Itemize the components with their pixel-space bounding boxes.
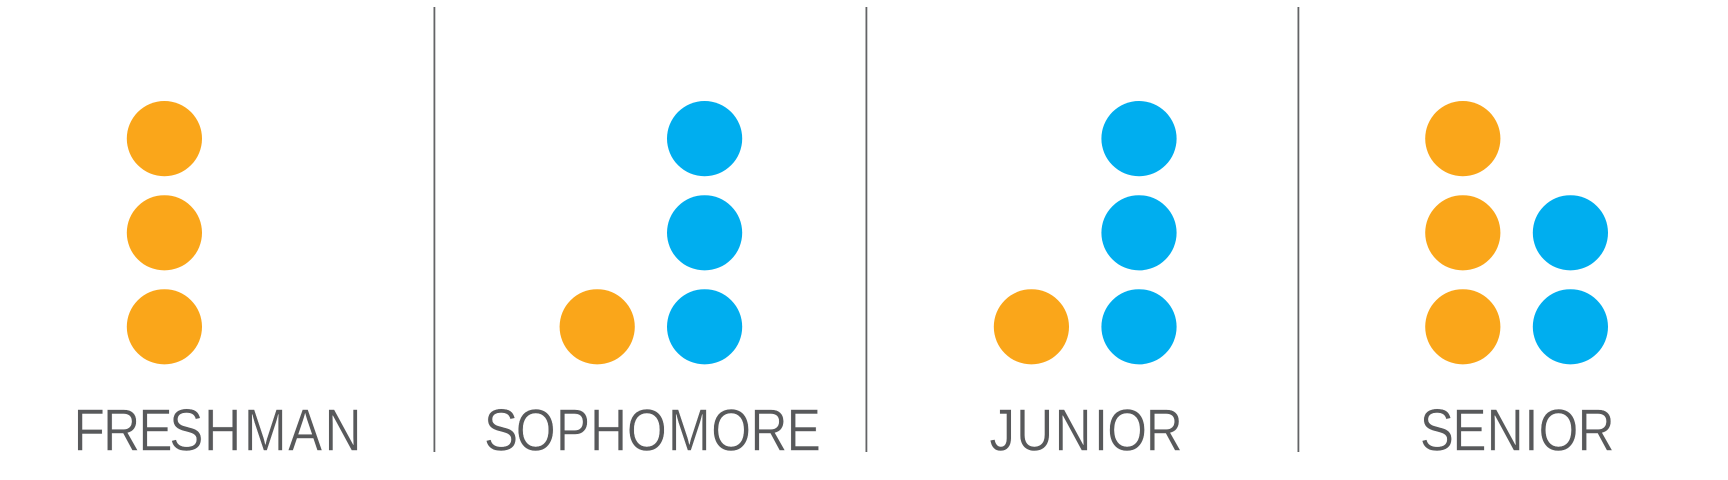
label: senior: SENIOR [1420, 397, 1615, 463]
panel: senior [1420, 101, 1615, 463]
panel: junior [989, 101, 1183, 463]
label: freshman: FRESHMAN [74, 397, 362, 463]
dots: sophomore [560, 101, 742, 364]
panel: sophomore [484, 101, 821, 463]
label: junior: JUNIOR [989, 397, 1183, 463]
dots: junior [994, 101, 1177, 364]
dots: senior [1425, 101, 1608, 364]
label: sophomore: SOPHOMORE [484, 397, 821, 463]
panel: freshman [74, 101, 362, 463]
dots: freshman [127, 101, 202, 364]
